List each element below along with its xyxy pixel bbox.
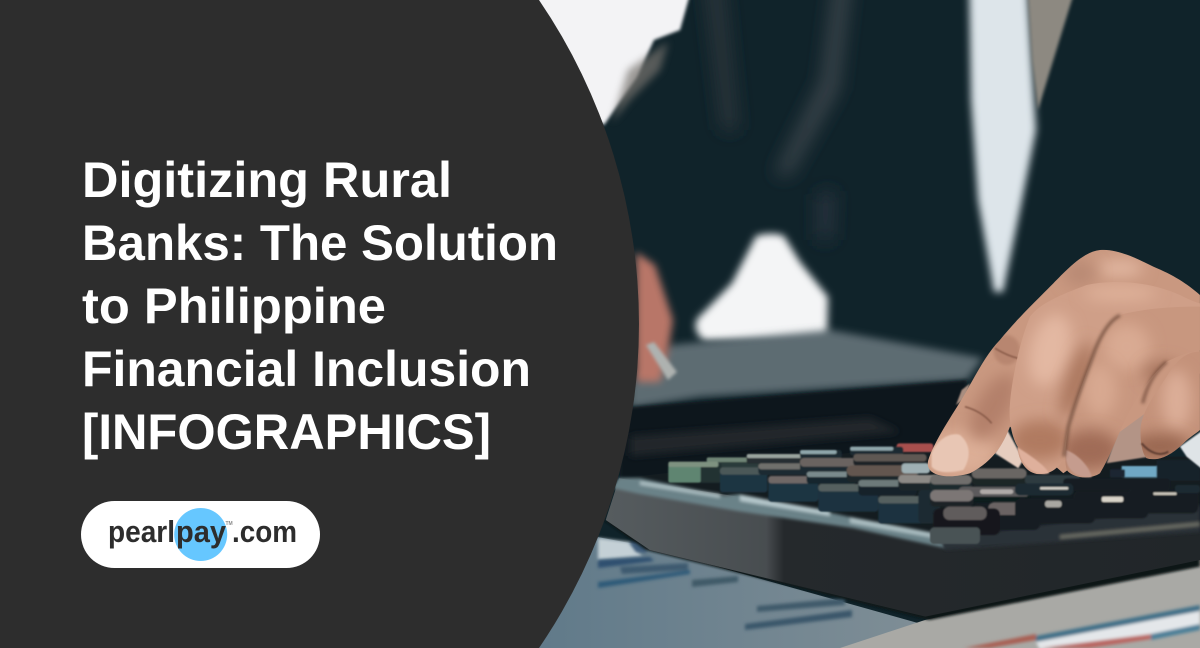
pen bbox=[646, 342, 677, 380]
middle finger bbox=[1007, 280, 1200, 480]
hand bbox=[928, 250, 1200, 478]
grey collar shadow bbox=[612, 42, 668, 122]
white sleeve at top left bbox=[530, 0, 694, 125]
jacket creases bbox=[703, 0, 852, 240]
dark curved panel bbox=[0, 0, 639, 648]
blue circle bbox=[174, 508, 227, 561]
calculator body bbox=[604, 447, 1200, 620]
blue panel behind keys bbox=[1122, 466, 1162, 477]
ring fingernail bbox=[1066, 450, 1092, 477]
title: Digitizing Rural bbox=[82, 152, 452, 208]
shirt placket bbox=[969, 0, 1036, 292]
title: [INFOGRAPHICS] bbox=[82, 404, 491, 460]
photo: businessperson using a calculator bbox=[520, 0, 1200, 648]
thumb edge and rear finger bbox=[956, 383, 970, 405]
ring finger bbox=[1060, 303, 1200, 483]
jacket background bbox=[520, 0, 1200, 648]
back row keys bbox=[707, 457, 760, 468]
knuckle crease bbox=[965, 348, 1018, 423]
crease under little finger bbox=[1143, 362, 1167, 403]
dark desk band bbox=[620, 380, 967, 480]
beige lapel band bbox=[1027, 0, 1078, 110]
red object behind keys bbox=[897, 443, 933, 452]
index fingernail bbox=[932, 434, 969, 472]
wordmark: pay bbox=[176, 514, 227, 549]
paper on desk bbox=[630, 330, 983, 408]
top surface bbox=[619, 447, 1200, 545]
lower paper left bbox=[520, 530, 925, 648]
crease under the knuckles bbox=[1142, 443, 1168, 454]
dark keys row bbox=[720, 467, 775, 492]
bright gap between arms bbox=[696, 234, 828, 343]
index finger and back of hand bbox=[928, 250, 1200, 476]
white pill bbox=[81, 501, 320, 568]
wordmark bbox=[108, 514, 297, 549]
left calculator keys bbox=[668, 443, 940, 523]
title bbox=[82, 152, 558, 460]
front face bbox=[606, 478, 1200, 617]
title: to Philippine bbox=[82, 278, 386, 334]
lower sheet right bbox=[840, 556, 1200, 648]
green key bbox=[668, 462, 722, 483]
calculator rim bbox=[612, 478, 945, 548]
trademark: TM bbox=[226, 521, 233, 527]
right calculator keys bbox=[930, 460, 1200, 544]
middle fingernail bbox=[1018, 447, 1049, 474]
lower front strip and edge line bbox=[940, 505, 1200, 550]
little finger bbox=[1140, 352, 1200, 460]
logo: pearlpay.com pill bbox=[81, 501, 320, 568]
title: Financial Inclusion bbox=[82, 341, 531, 397]
title: Banks: The Solution bbox=[82, 215, 558, 271]
wordmark: .com bbox=[232, 514, 297, 549]
paper light corner bbox=[598, 538, 642, 560]
wordmark: pearl bbox=[108, 514, 175, 549]
paper dark chart lines bbox=[598, 541, 852, 630]
crease between fingers bbox=[1064, 315, 1120, 457]
cuff and gap behind fingers bbox=[1107, 387, 1153, 463]
sheet colour stripes bbox=[964, 605, 1200, 648]
blurred left hand bbox=[636, 252, 673, 382]
body shadow bbox=[604, 517, 1200, 620]
